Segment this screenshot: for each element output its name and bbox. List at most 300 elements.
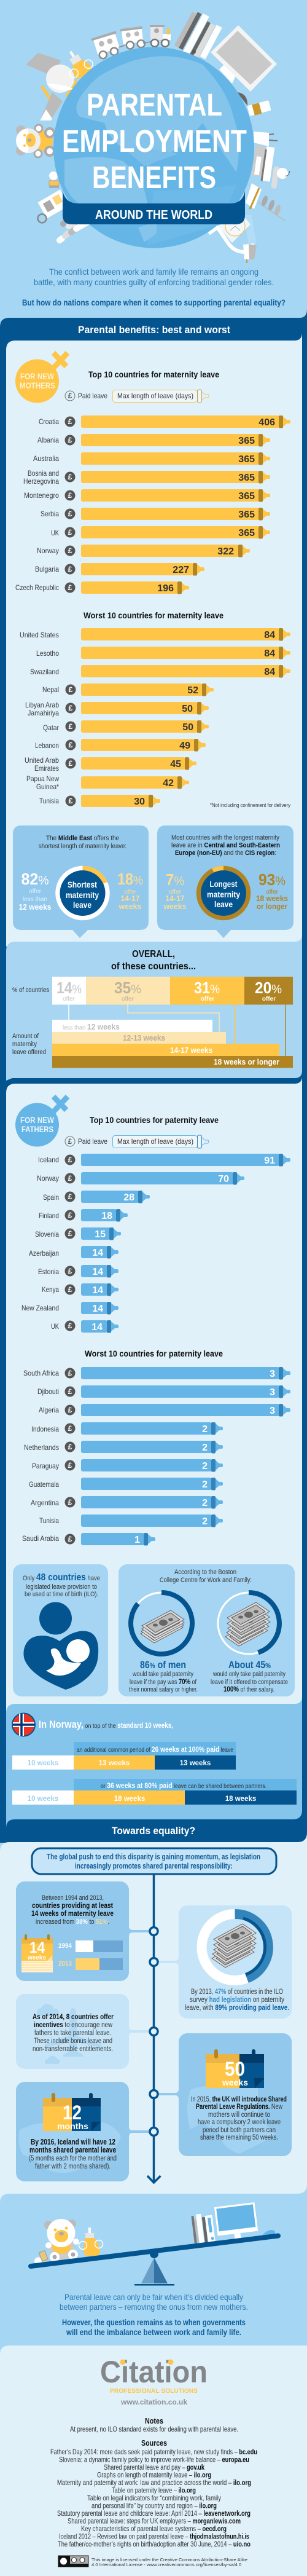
chart: ring 86 percent — [131, 1593, 192, 1654]
row: Australia: Australia — [33, 454, 59, 463]
row: Qatar — [43, 720, 209, 733]
sources — [50, 2439, 257, 2548]
row: United Arab Emirates — [25, 756, 196, 773]
chart: amount of leave: 14-17 weeks — [170, 1046, 212, 1055]
row: Norway: £ — [68, 546, 72, 555]
row: Spain: £ — [68, 1192, 72, 1201]
legend: £ — [68, 1137, 72, 1146]
icon: apple — [277, 168, 290, 179]
stat: about 45 percent — [211, 1659, 288, 1693]
panel: overall: of these countries... — [111, 961, 196, 972]
badge: for new fathers — [15, 1097, 68, 1147]
notes — [70, 2417, 238, 2433]
row: Spain: Spain — [43, 1193, 59, 1202]
label: amount of maternity leave offered — [12, 1033, 46, 1056]
icon: 14 weeks calendar: 14 — [29, 1939, 45, 1956]
stat: 82%: offer — [29, 888, 42, 895]
heading: top 10 maternity: Top 10 countries for maternity leave — [88, 369, 219, 379]
text: 48 countries: Only 48 countries have — [23, 1572, 100, 1583]
row: Libyan Arab Jamahiriya: £ — [69, 704, 73, 712]
timeline box: incentives: fathers to take parental leave. — [34, 2030, 111, 2037]
panel: Norway — [6, 1696, 302, 1828]
stat: about 45 percent: would only take paid paternity — [212, 1671, 286, 1678]
row: UK — [51, 1320, 119, 1333]
row: New Zealand — [21, 1302, 119, 1314]
row: Estonia: Estonia — [38, 1267, 59, 1276]
icon: 12 months calendar: 12 — [63, 2101, 82, 2124]
row: Lesotho: Lesotho — [36, 649, 59, 658]
row: Bulgaria — [35, 563, 204, 575]
label: amount of maternity leave offered: leave offered — [12, 1049, 46, 1056]
chart: amount of leave: 18 weeks or longer — [214, 1057, 279, 1066]
row: Djibouti: £ — [68, 1387, 72, 1396]
sources: and personal life” by country and region – ilo.org — [91, 2502, 217, 2510]
bars: top 10 paternity — [21, 1154, 290, 1333]
row: Australia: 365 — [238, 454, 255, 465]
chart: share of countries: offer — [262, 996, 276, 1002]
timeline box: incentives: These include bonus leave and — [34, 2038, 112, 2045]
timeline box: 1994 to 2013: increased from 38% to 51%. — [36, 1918, 109, 1926]
icon: Norway flag — [12, 1714, 35, 1736]
row: Czech Republic: £ — [68, 583, 72, 592]
row: Libyan Arab Jamahiriya: Jamahiriya — [28, 709, 59, 717]
stat: 7%: weeks — [163, 902, 187, 911]
row: Norway: 70 — [218, 1174, 229, 1184]
row: Norway: 322 — [217, 546, 234, 557]
row: Netherlands: £ — [68, 1443, 72, 1451]
title: BENEFITS — [92, 160, 216, 195]
logo: Citation — [100, 2355, 208, 2406]
row: Estonia — [38, 1265, 119, 1277]
row: South Africa: £ — [68, 1369, 72, 1377]
icon: pram — [26, 53, 76, 120]
row: Montenegro: Montenegro — [24, 491, 59, 500]
row: UK: UK — [51, 529, 59, 537]
legend: Paid leave — [78, 1137, 107, 1146]
row: Swaziland — [30, 665, 290, 677]
row: Tunisia: Tunisia — [39, 797, 59, 805]
icon: pacifier — [49, 171, 59, 188]
row: South Africa: 3 — [270, 1369, 275, 1379]
row: Montenegro — [24, 489, 270, 502]
row: Tunisia — [39, 795, 160, 808]
chart: share of countries — [52, 977, 293, 1004]
row: Serbia: 365 — [238, 510, 255, 520]
icon: binders — [250, 145, 282, 189]
icon: 50 weeks calendar: weeks — [222, 2078, 248, 2087]
logo: Citation: Citation — [100, 2355, 208, 2389]
row: Netherlands — [24, 1441, 223, 1453]
timeline box: paternity legislation: survey had legislation on paternity — [190, 1996, 284, 2004]
chart: 26 weeks at 100% paid: 10 weeks — [28, 1760, 58, 1767]
badge: for new fathers: FOR NEW — [20, 1115, 55, 1125]
row: UK — [51, 526, 270, 538]
row: Saudi Arabia — [22, 1533, 155, 1545]
legend: £ — [68, 392, 72, 400]
text: 48 countries: legislated leave provision to — [26, 1583, 97, 1591]
stat: 18%: 18% — [117, 870, 143, 888]
chart: share of countries: 14% — [56, 979, 82, 997]
row: Paraguay — [32, 1459, 223, 1471]
panel: seesaw conclusion — [0, 2184, 307, 2346]
row: Lebanon — [35, 739, 206, 751]
row: Argentina: Argentina — [31, 1499, 59, 1507]
row: UK: UK — [51, 1322, 59, 1331]
sources: Key characteristics of parental leave systems – oecd.org — [81, 2524, 227, 2533]
timeline box: 1994 to 2013: countries providing at least — [32, 1901, 113, 1910]
row: Indonesia: Indonesia — [31, 1425, 59, 1433]
row: Paraguay: Paraguay — [32, 1462, 59, 1470]
timeline box: Iceland 12 months: By 2016, Iceland will have 12 — [31, 2138, 115, 2146]
panel: footer — [0, 2346, 307, 2576]
donut: shortest — [58, 868, 107, 918]
row: Azerbaijan: Azerbaijan — [29, 1249, 59, 1258]
row: Lesotho: 84 — [264, 648, 275, 659]
license text: This image is licensed under the Creative Commons Attribution-Share Alike — [91, 2557, 247, 2562]
row: Lesotho — [36, 647, 290, 659]
row: Bulgaria: 227 — [173, 565, 189, 575]
timeline box: UK 50 weeks: mothers will continue to — [208, 2111, 270, 2119]
row: Australia — [33, 452, 270, 465]
legend: Max length of leave (days) — [117, 1137, 193, 1146]
footnote: *Not including confinement for delivery — [210, 802, 290, 808]
chart: 1994 vs 2013 bars — [58, 1940, 123, 1970]
row: Iceland: 91 — [264, 1156, 275, 1166]
row: Guatemala: Guatemala — [29, 1480, 59, 1489]
row: Kenya: Kenya — [42, 1285, 59, 1294]
stat: 82%: 12 weeks — [18, 902, 52, 912]
sources: Statutory parental leave and childcare leave: April 2014 – leavenetwork.org — [57, 2509, 251, 2518]
decoration: UK map — [187, 2078, 276, 2154]
row: Bosnia and Herzegovina: Herzegovina — [23, 477, 59, 486]
row: Albania: 365 — [238, 436, 255, 446]
row: Lebanon: Lebanon — [35, 741, 59, 750]
heading: worst 10 paternity: Worst 10 countries for paternity leave — [85, 1349, 223, 1358]
donut: shortest: maternity — [66, 890, 99, 900]
stat: 93% — [256, 870, 288, 911]
intro text: The conflict between work and family life remains an ongoing — [49, 267, 258, 277]
chart: share of countries: offer — [201, 996, 214, 1002]
row: Bosnia and Herzegovina: Bosnia and — [28, 469, 59, 478]
dark blue band and body — [0, 309, 307, 1843]
row: Qatar: £ — [69, 722, 73, 731]
chart: share of countries: offer — [122, 996, 134, 1002]
text: 48 countries — [23, 1572, 100, 1598]
icon: mouse and pills — [237, 92, 271, 116]
callout: longest maternity leave: leave are in Central and South-Eastern — [171, 842, 280, 849]
stat: 86 percent of men — [129, 1659, 198, 1693]
heading: top 10 paternity: Top 10 countries for paternity leave — [90, 1115, 219, 1125]
row: UK: 365 — [238, 528, 255, 538]
row: Estonia: £ — [68, 1267, 72, 1275]
row: UK: £ — [68, 1321, 72, 1330]
stat: 86 percent of men: their normal salary or higher. — [129, 1686, 198, 1693]
row: Papua New Guinea: Papua New — [26, 774, 59, 783]
closing text: will end the imbalance between work and family life. — [66, 2327, 241, 2337]
row: Bosnia and Herzegovina: £ — [68, 473, 72, 481]
logo: Citation: www.citation.co.uk — [120, 2398, 187, 2406]
closing text: Parental leave can only be fair when it’s divided equally — [64, 2292, 243, 2302]
notes: At present, no ILO standard exists for dealing with parental leave. — [70, 2425, 238, 2433]
row: Saudi Arabia: Saudi Arabia — [22, 1534, 59, 1543]
row: UK: £ — [68, 528, 72, 537]
row: Bulgaria: £ — [68, 565, 72, 573]
header illustration: objects around globe — [16, 9, 290, 263]
row: Finland — [39, 1209, 128, 1222]
title — [62, 87, 247, 195]
row: Qatar: 50 — [182, 722, 193, 733]
chart: amount of leave — [52, 1020, 293, 1068]
stat: about 45 percent: 100% of their salary. — [223, 1685, 274, 1693]
chart: amount of leave: less than 12 weeks — [63, 1022, 120, 1031]
seesaw beam — [31, 2236, 278, 2266]
row: United Arab Emirates: United Arab — [25, 756, 59, 765]
row: South Africa — [23, 1367, 290, 1379]
row: Libyan Arab Jamahiriya: 50 — [182, 704, 193, 714]
row: Serbia: Serbia — [41, 510, 59, 518]
panel: Boston College Centre: According to the Boston — [174, 1569, 236, 1576]
stat: 93%: offer — [266, 889, 279, 896]
timeline box: UK 50 weeks: In 2015, the UK will introduce Shared — [191, 2096, 287, 2103]
row: Tunisia: Tunisia — [39, 1516, 59, 1525]
row: Finland: 18 — [101, 1211, 112, 1221]
sources: Table on legal indicators for “combining work, family — [87, 2494, 221, 2502]
row: Kenya: £ — [68, 1285, 72, 1294]
ribbon text: AROUND THE WORLD — [95, 208, 212, 222]
panel: towards equality — [0, 1832, 307, 2207]
heading: towards equality: Towards equality? — [112, 1825, 195, 1837]
logo: Citation: PROFESSIONAL SOLUTIONS — [110, 2387, 198, 2395]
callout: global push: increasingly promotes shared parental responsibility: — [75, 1861, 233, 1870]
row: Argentina: £ — [68, 1498, 72, 1507]
intro text — [22, 267, 286, 307]
row: Indonesia: £ — [68, 1424, 72, 1433]
callout: shortest maternity leave: The Middle East offers the — [46, 835, 119, 842]
timeline box: Iceland 12 months: months shared parental leave — [29, 2146, 116, 2154]
icon: creative commons badge — [58, 2556, 88, 2567]
row: Norway — [37, 545, 250, 557]
chart: 26 weeks at 100% paid: an additional common period of 26 weeks at 100% paid leave — [77, 1745, 233, 1754]
row: Albania: Albania — [37, 436, 59, 444]
row: Algeria: 3 — [270, 1406, 275, 1416]
row: Montenegro: £ — [68, 491, 72, 500]
row: Papua New Guinea — [26, 774, 189, 791]
icon: office items — [190, 2202, 259, 2247]
legend — [65, 1135, 209, 1148]
chart: 26 weeks at 100% paid — [12, 1742, 236, 1770]
icon: rattle — [60, 215, 93, 240]
legend: Paid leave — [78, 392, 107, 400]
icon: baby monitor — [30, 189, 70, 224]
icon: computer monitor — [211, 25, 277, 92]
decoration: Iceland map — [18, 2121, 121, 2173]
bars: worst 10 paternity — [22, 1367, 290, 1545]
stat: about 45 percent: About 45% — [228, 1659, 271, 1671]
row: Iceland: £ — [68, 1156, 72, 1164]
row: Bulgaria: Bulgaria — [35, 565, 59, 573]
timeline box: UK 50 weeks — [157, 2033, 292, 2156]
stat: 18%: 14-17 — [120, 894, 140, 903]
row: Paraguay: £ — [68, 1461, 72, 1470]
stat: 7%: 7% — [166, 870, 184, 889]
stat: 82%: 82% — [21, 870, 49, 888]
timeline box: Iceland 12 months: (5 months each for the mother and — [29, 2155, 117, 2162]
row: United Arab Emirates: 45 — [170, 759, 181, 770]
heading: in Norway: In Norway, on top of the standard 10 weeks, — [39, 1719, 173, 1730]
panel: for new mothers — [6, 333, 302, 947]
row: Indonesia: 2 — [202, 1424, 208, 1435]
icon: toy train — [91, 25, 171, 60]
chart: share of countries: 20% — [255, 979, 282, 997]
callout: global push — [32, 1848, 276, 1874]
badge: for new mothers — [15, 353, 68, 403]
chart: 1994 vs 2013 bars: 1994 — [58, 1942, 72, 1950]
row: United Arab Emirates: Emirates — [34, 764, 59, 773]
heading: worst 10 maternity: Worst 10 countries for maternity leave — [84, 610, 223, 620]
timeline box: paternity legislation: By 2013, 47% of countries in the ILO — [191, 1988, 283, 1996]
ribbon: around the world — [63, 191, 245, 224]
closing text — [60, 2292, 248, 2337]
intro text: battle, with many countries guilty of enforcing traditional gender roles. — [34, 277, 274, 287]
globe — [53, 47, 254, 248]
stat: 86 percent of men: leave if the pay was 70% of — [130, 1677, 197, 1686]
sources: Graphs on length of maternity leave – ilo.org — [97, 2471, 211, 2479]
row: Nepal — [42, 683, 214, 696]
panel: overall — [6, 934, 302, 1081]
row: Lebanon: 49 — [179, 741, 190, 751]
row: Nepal: £ — [69, 685, 73, 694]
stat: 7%: offer — [169, 889, 182, 896]
closing text: between partners – removing the onus from new mothers. — [60, 2302, 248, 2312]
icon: seesaw fulcrum — [134, 2250, 174, 2285]
row: Netherlands: 2 — [202, 1443, 208, 1453]
donut: shortest: Shortest — [68, 880, 97, 889]
row: Saudi Arabia: 1 — [134, 1535, 140, 1545]
icon: 50 weeks calendar: 50 — [225, 2058, 245, 2080]
stat: 93%: or longer — [257, 902, 287, 911]
row: Montenegro: 365 — [238, 491, 255, 502]
row: Guatemala — [29, 1478, 223, 1490]
timeline box: incentives: As of 2014, 8 countries offer — [33, 2012, 114, 2021]
row: Nepal: Nepal — [42, 685, 59, 694]
stat: 86 percent of men: 86% of men — [140, 1659, 186, 1671]
chart: ring 47 percent — [201, 1914, 268, 1980]
row: Croatia: 406 — [258, 417, 275, 428]
stat: 7% — [163, 870, 187, 911]
icon: books — [174, 9, 224, 63]
icon: 14 weeks calendar — [21, 1934, 53, 1972]
closing text: However, the question remains as to when governments — [62, 2317, 246, 2327]
row: Albania: £ — [68, 436, 72, 444]
row: Iceland — [38, 1154, 290, 1167]
sources: Shared parental leave: steps for UK employers – morganlewis.com — [68, 2516, 241, 2525]
row: Libyan Arab Jamahiriya: Libyan Arab — [25, 701, 59, 709]
row: Swaziland: Swaziland — [30, 668, 59, 676]
row: Azerbaijan: 14 — [92, 1248, 103, 1258]
icon: mother and baby — [23, 1602, 98, 1690]
connector lines — [68, 1004, 69, 1020]
row: Papua New Guinea: Guinea* — [36, 782, 59, 791]
stat: 82% — [18, 870, 52, 912]
timeline nodes — [150, 1928, 158, 2135]
chart: 36 weeks at 80% paid — [12, 1779, 297, 1805]
label: % of countries: % of countries — [12, 987, 49, 994]
row: Serbia: £ — [68, 510, 72, 518]
timeline box: UK 50 weeks: Parental Leave Regulations. New — [196, 2103, 283, 2111]
timeline line — [147, 1874, 161, 2183]
icon: mouse — [262, 2230, 275, 2235]
legend — [65, 390, 209, 403]
stat: 18%: weeks — [119, 902, 141, 911]
icon: baby bottle — [60, 45, 96, 82]
stat: about 45 percent: leave if it offered to compensate — [211, 1679, 288, 1686]
icon: folder and leaf — [246, 183, 285, 221]
callout: shortest maternity leave — [13, 825, 149, 938]
row: Kenya: 14 — [92, 1285, 103, 1296]
row: Papua New Guinea: 42 — [163, 778, 174, 789]
timeline box: paternity legislation — [157, 1905, 292, 2019]
row: Serbia — [41, 508, 270, 520]
chart: 36 weeks at 80% paid: 10 weeks — [28, 1795, 58, 1803]
stat: 86 percent of men: would take paid paternity — [132, 1671, 193, 1678]
panel: for new fathers — [6, 1076, 302, 1715]
sources: The father/co-mother’s rights on birth/adoption after 30 June, 2014 – uio.no — [58, 2540, 251, 2548]
row: Slovenia: £ — [68, 1229, 72, 1238]
timeline box: incentives: incentives to encourage new — [34, 2022, 113, 2029]
chart: share of countries: 35% — [114, 979, 141, 997]
row: South Africa: South Africa — [23, 1369, 59, 1377]
icon: baby bottle — [79, 2227, 103, 2256]
row: Tunisia: £ — [69, 797, 73, 805]
row: Saudi Arabia: £ — [68, 1535, 72, 1543]
row: New Zealand: 14 — [92, 1304, 103, 1314]
row: New Zealand: New Zealand — [21, 1304, 59, 1312]
chart: 36 weeks at 80% paid: 18 weeks — [225, 1795, 256, 1803]
badge: for new fathers: FATHERS — [21, 1124, 53, 1134]
row: Algeria: £ — [68, 1406, 72, 1414]
bars: worst 10 maternity — [20, 628, 290, 808]
panel: 48 countries — [13, 1564, 108, 1696]
row: United States: United States — [20, 631, 59, 639]
row: Croatia — [39, 416, 290, 428]
row: Norway — [37, 1172, 244, 1185]
row: UK: 14 — [91, 1322, 103, 1333]
row: Bosnia and Herzegovina: 365 — [238, 473, 255, 483]
chart: 36 weeks at 80% paid: 18 weeks — [114, 1795, 145, 1803]
icon: breast pump — [209, 206, 257, 263]
timeline box: 1994 to 2013: 14 weeks of maternity leave — [31, 1909, 114, 1918]
row: Finland: Finland — [39, 1211, 59, 1220]
row: Slovenia: 15 — [95, 1229, 106, 1240]
row: Norway: Norway — [37, 1174, 59, 1183]
label: amount of maternity leave offered: Amount of — [12, 1033, 39, 1040]
row: Iceland: Iceland — [38, 1156, 59, 1164]
row: Norway: £ — [68, 1174, 72, 1183]
row: Nepal: 52 — [187, 685, 198, 696]
legend: Max length of leave (days) — [117, 392, 193, 400]
row: Spain — [43, 1191, 150, 1203]
callout: longest maternity leave: Europe (non-EU) and the CIS region: — [175, 849, 276, 857]
row: Argentina — [31, 1496, 223, 1508]
callout: shortest maternity leave: shortest length of maternity leave: — [39, 843, 126, 850]
badge: for new mothers: FOR NEW — [20, 371, 55, 381]
row: Djibouti — [37, 1385, 290, 1398]
row: Croatia: Croatia — [39, 417, 59, 426]
row: Kenya — [42, 1283, 119, 1296]
chart: ring 45 percent — [218, 1593, 279, 1654]
row: Finland: £ — [68, 1211, 72, 1219]
sources: Table on paternity leave – ilo.org — [112, 2486, 196, 2494]
